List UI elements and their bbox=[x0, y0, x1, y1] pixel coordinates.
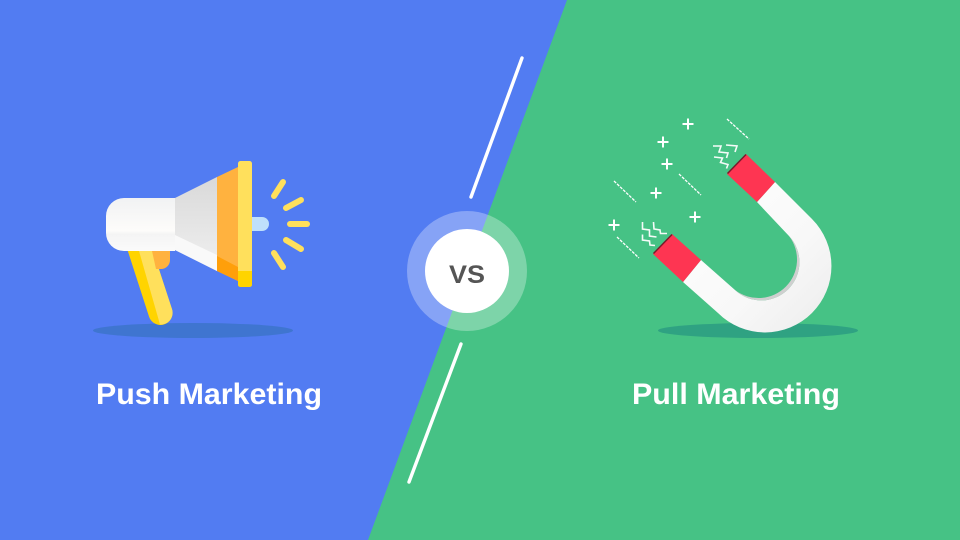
magnet inner shadow bbox=[735, 236, 799, 300]
green diagonal panel bbox=[368, 0, 960, 540]
vs badge bbox=[407, 211, 527, 331]
handle body bbox=[106, 198, 175, 251]
zigzag field lines bbox=[642, 145, 737, 246]
orange bell bbox=[217, 167, 238, 281]
plus signs bbox=[608, 118, 700, 230]
lower red tip bbox=[653, 234, 701, 282]
icon: magnet bbox=[608, 118, 858, 338]
orange neck bbox=[152, 251, 170, 269]
magnet body bbox=[683, 182, 831, 332]
heading: push marketing: Push Marketing bbox=[96, 378, 322, 411]
icon: megaphone bbox=[93, 161, 307, 338]
sound nub bbox=[252, 217, 269, 231]
upper diagonal line bbox=[471, 58, 522, 197]
magnet ground shadow bbox=[658, 323, 858, 338]
lower diagonal line bbox=[409, 344, 461, 482]
megaphone handle bbox=[138, 245, 173, 325]
megaphone ground shadow bbox=[93, 323, 293, 338]
upper red tip bbox=[727, 154, 775, 202]
dashed motion lines bbox=[614, 119, 749, 258]
heading: pull marketing: Pull Marketing bbox=[632, 378, 840, 411]
rim bbox=[238, 161, 252, 287]
sound rays bbox=[274, 182, 307, 267]
vs badge: VS bbox=[449, 261, 485, 289]
cone bbox=[175, 177, 217, 271]
